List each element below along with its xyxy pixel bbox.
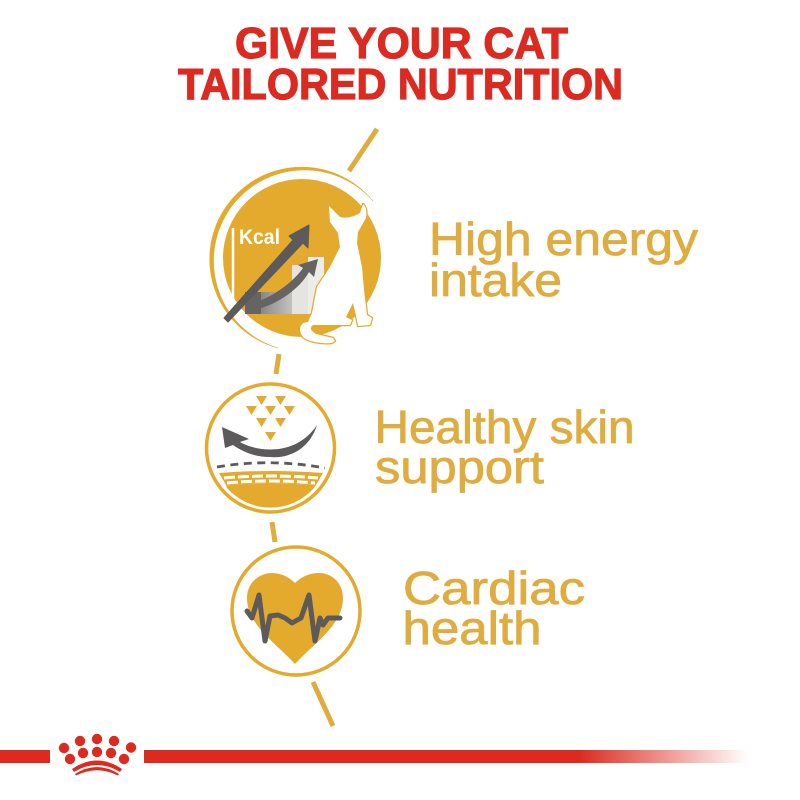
nutrient triangles [246, 396, 295, 441]
heading: high energy intake [429, 213, 698, 306]
heading: high energy intake: High energy [429, 213, 698, 265]
title [178, 20, 623, 109]
heartbeat line [247, 595, 340, 641]
title: GIVE YOUR CAT [235, 20, 568, 68]
connector segment: skin to heart [272, 522, 275, 542]
footer band left [0, 750, 50, 763]
curved arrow [222, 425, 317, 457]
heading: cardiac health: health [402, 602, 542, 654]
heading: high energy intake: intake [429, 254, 562, 306]
heading: healthy skin support: Healthy skin [374, 401, 634, 453]
rising bars [245, 257, 324, 314]
icon: cardiac health [232, 547, 360, 675]
footer band right [144, 750, 748, 763]
heart [247, 573, 343, 664]
icon: healthy skin [206, 384, 334, 512]
skin base layer [226, 484, 316, 508]
Kcal label: Kcal [239, 226, 280, 249]
large arrow [224, 225, 309, 322]
skin barrier dashed line [217, 463, 325, 468]
connector segment: energy to skin [276, 354, 279, 374]
connector segment: bottom [313, 682, 333, 726]
heading: healthy skin support: support [375, 441, 544, 493]
skin layer cells [219, 471, 323, 485]
icon: energy intake, cat and Kcal chart [210, 167, 381, 348]
heading: cardiac health [402, 562, 585, 654]
Kcal axis [232, 228, 234, 314]
title: TAILORED NUTRITION [178, 61, 623, 109]
logo: crown [59, 734, 136, 776]
heading: healthy skin support [374, 401, 634, 493]
small arrow [256, 259, 318, 309]
heading: cardiac health: Cardiac [403, 562, 585, 614]
connector segment: top [349, 129, 377, 171]
cat silhouette [300, 204, 372, 343]
